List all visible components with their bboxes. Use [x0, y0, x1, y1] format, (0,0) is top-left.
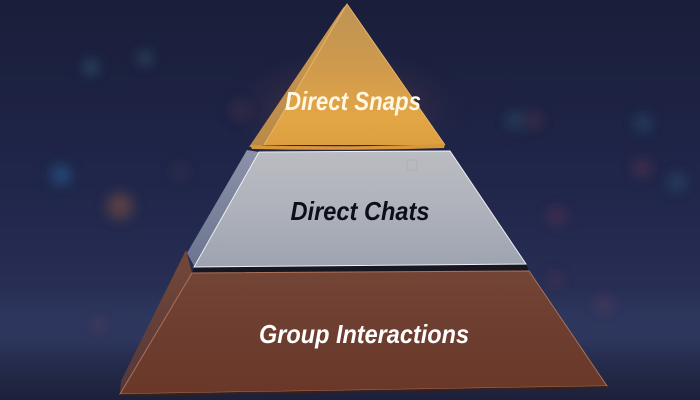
gold base highlight	[266, 144, 440, 146]
gold edges	[264, 4, 445, 145]
glow behind gold tier	[222, 45, 472, 175]
circuit detail on silver	[215, 160, 506, 252]
silver tier: direct chats	[187, 150, 526, 267]
floor band	[0, 300, 700, 340]
gold base band	[250, 144, 445, 150]
copper shadow under silver	[192, 263, 529, 274]
copper bottom edge	[120, 386, 607, 396]
silver left side face	[187, 150, 259, 266]
copper tier: group interactions	[120, 250, 607, 396]
label: group interactions: Group Interactions	[259, 319, 469, 349]
copper left side face	[120, 250, 192, 394]
label: direct snaps: Direct Snaps	[285, 86, 421, 116]
gold front face	[264, 4, 445, 145]
gold left side face	[249, 4, 347, 147]
gold tier: direct snaps	[249, 4, 445, 150]
label: direct chats: Direct Chats	[290, 196, 430, 226]
copper front face	[120, 271, 607, 394]
silver front face	[194, 151, 526, 267]
bokeh lights	[51, 51, 686, 330]
